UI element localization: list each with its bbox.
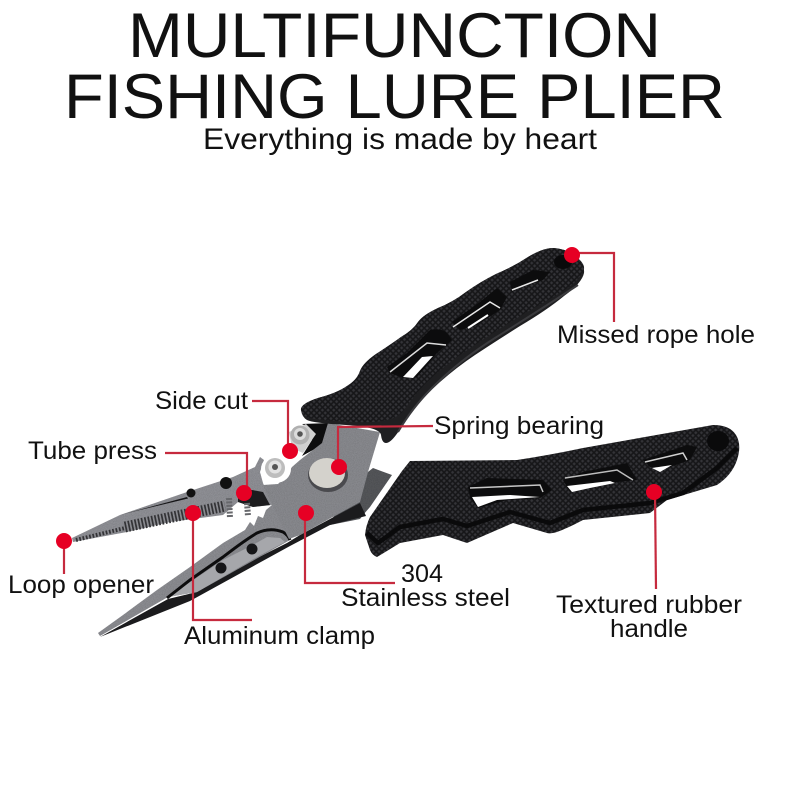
springs — [229, 498, 230, 518]
black recess near upper handle — [302, 423, 330, 456]
handle cut-out 3 — [510, 270, 550, 292]
callout: tube press — [28, 437, 252, 501]
inner slot panel — [168, 537, 285, 597]
handle cut-out 3 — [643, 445, 697, 472]
dark lower edge of the jaw — [100, 503, 366, 637]
callout: missed rope hole — [557, 247, 755, 349]
callout: spring bearing — [331, 412, 604, 475]
title: FISHING LURE PLIER — [64, 62, 725, 132]
callout: textured rubber handle — [556, 484, 742, 643]
jaw holes — [246, 544, 258, 554]
black block — [238, 490, 270, 507]
black stripe between top and side — [367, 448, 737, 543]
callout: textured rubber handle: Textured rubber — [556, 591, 742, 619]
handle cut-out 2 — [563, 463, 637, 492]
pivot bearing — [308, 458, 348, 492]
lower handle — [365, 425, 739, 557]
callout: aluminum clamp: Aluminum clamp — [184, 622, 375, 650]
jaw teeth — [96, 528, 243, 632]
callout: side cut — [155, 387, 298, 459]
upper handle — [301, 248, 584, 443]
callout: 304 stainless steel: Stainless steel — [341, 584, 510, 612]
upper jaw slit — [120, 497, 188, 515]
handle cut-out 1 — [468, 478, 552, 508]
curved slot line — [167, 530, 290, 598]
title — [64, 1, 725, 132]
steel plate — [263, 423, 380, 539]
title: MULTIFUNCTION — [128, 1, 661, 71]
handle hole — [707, 431, 729, 451]
callout: missed rope hole: Missed rope hole — [557, 321, 755, 349]
callout: 304 stainless steel — [298, 505, 510, 612]
pliers illustration — [72, 248, 739, 637]
handle cut-out 1 — [387, 329, 452, 378]
rope hole — [554, 255, 572, 269]
callout: textured rubber handle: handle — [610, 615, 688, 643]
callout: tube press: Tube press — [28, 437, 157, 465]
callout: 304 stainless steel: 304 — [401, 560, 443, 588]
jaw holes — [186, 488, 196, 498]
callout: aluminum clamp — [184, 505, 375, 650]
callout: loop opener: Loop opener — [8, 571, 154, 599]
screws — [261, 424, 316, 483]
callout: spring bearing: Spring bearing — [434, 412, 604, 440]
lower jaw — [96, 505, 300, 636]
callout: loop opener — [8, 533, 154, 599]
upper jaw — [72, 457, 272, 542]
subtitle: Everything is made by heart — [203, 123, 598, 156]
rear lever behind the plate — [330, 468, 392, 525]
side band highlight — [398, 285, 578, 432]
handle cut-out 2 — [452, 288, 507, 330]
callout: side cut: Side cut — [155, 387, 248, 415]
upper jaw serration — [76, 506, 225, 540]
